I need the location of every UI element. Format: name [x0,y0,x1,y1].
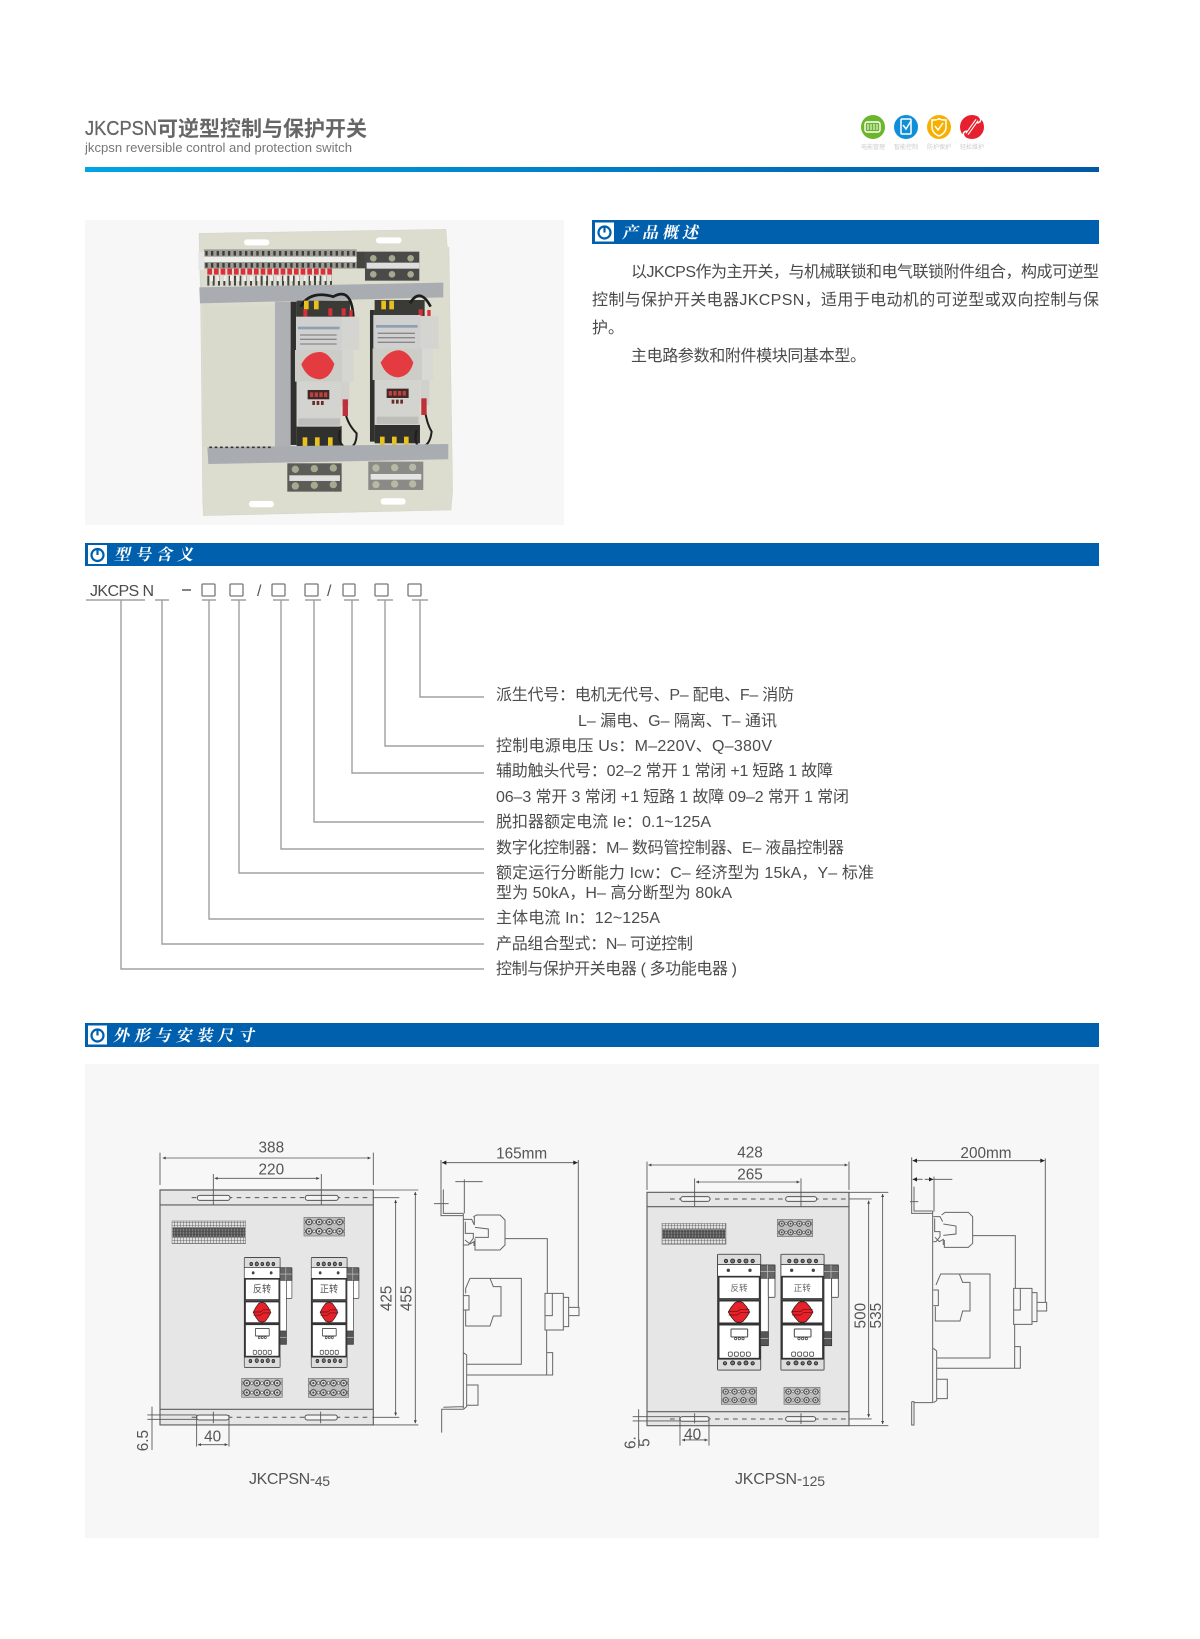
text block: product overview: 以JKCPS作为主开关，与机械联锁和电气联锁附件组合，构成可逆型 [631,263,1099,281]
text block: product overview [592,263,1099,365]
breaker: forward: 正转 [320,1282,338,1296]
dimension lines [633,1162,888,1448]
section header: 外形与安装尺寸 [85,1022,1099,1047]
dimension text: 425 [379,1286,396,1311]
caption: JKCPSN-125: JKCPSN- [735,1471,802,1488]
slots [197,1195,338,1420]
section header: 外形与安装尺寸: 外形与安装尺寸 [112,1022,258,1046]
parameter descriptions: L– 漏电、G– 隔离、T– 通讯 [578,712,777,730]
section header: 型号含义 [85,541,1099,566]
text block: product overview: 护。 [592,319,624,337]
right breaker in photo [370,296,439,447]
section header: 产品概述: 产品概述 [621,219,703,243]
caption: JKCPSN-45: 45 [315,1473,330,1489]
dimension text [623,1144,885,1449]
dimension text: 500 [853,1303,870,1328]
drawing: JKCPSN-125 front view [623,1144,888,1449]
parameter descriptions: 派生代号：电机无代号、P– 配电、F– 消防 [496,686,794,704]
subtitle: jkcpsn reversible control and protection switch [84,141,352,155]
dimension text: 220 [259,1161,284,1178]
breaker: reverse: 反转 [730,1282,748,1293]
drawing: JKCPSN-45 side view [434,1146,579,1433]
title: Chinese name: 可逆型控制与保护开关 [157,117,367,141]
dimension text: 265 [737,1166,763,1183]
parameter descriptions: 额定运行分断能力 Icw：C– 经济型为 15kA，Y– 标准 [496,864,874,882]
terminal strip [662,1223,726,1244]
slots [680,1197,817,1421]
parameter descriptions: 数字化控制器：M– 数码管控制器、E– 液晶控制器 [496,839,844,857]
left breaker in photo [291,294,359,448]
dimension text: 388 [259,1140,284,1157]
dimension text: 6.5 [135,1430,152,1451]
bottom terminal blocks in photo [287,462,423,492]
breaker: forward [781,1254,838,1370]
section header: 型号含义: 型号含义 [113,541,197,565]
text block: product overview: 主电路参数和附件模块同基本型。 [631,347,866,365]
parameter descriptions: 脱扣器额定电流 Ie：0.1~125A [496,813,711,831]
leader lines [86,600,484,969]
dimension text [135,1140,416,1451]
breaker: reverse [244,1258,292,1367]
icon: battery: 电能管理 [861,143,885,151]
title: model name: JKCPSN [85,118,157,140]
product photo: mounting plate with breakers [198,229,453,516]
breaker: forward: 正转 [794,1282,811,1293]
dimension lines [147,1153,418,1450]
text block: product overview: 控制与保护开关电器JKCPSN，适用于电动机的可逆型或双向控制与保 [592,291,1099,309]
model code: JKCPS N [90,583,154,600]
icon: power [595,222,614,242]
parameter descriptions: 产品组合型式：N– 可逆控制 [496,935,693,953]
parameter descriptions: 型为 50kA，H– 高分断型为 80kA [496,884,732,902]
drawing: JKCPSN-45 side view: 165mm [496,1146,547,1163]
title block [84,117,367,155]
dimension text: 455 [399,1286,416,1311]
drawing: JKCPSN-125 side view [910,1145,1047,1425]
dimension text: 428 [737,1144,763,1161]
dimension text: 40 [684,1426,701,1443]
parameter descriptions: 控制与保护开关电器 ( 多功能电器 ) [496,960,737,978]
drawing: JKCPSN-45 front view [135,1140,418,1451]
breaker: reverse [718,1254,775,1370]
parameter descriptions [496,686,874,978]
parameter descriptions: 辅助触头代号：02–2 常开 1 常闭 +1 短路 1 故障 [496,762,833,780]
model code diagram [86,583,874,978]
dimension text: 6. [623,1436,640,1449]
product photo panel [85,220,564,525]
parameter descriptions: 主体电流 In：12~125A [496,909,660,927]
terminal blocks [721,1219,820,1404]
breaker: forward [311,1258,359,1367]
icon: wrench: 轻松维护 [960,143,984,151]
header gradient bar [85,167,1099,172]
section header: 产品概述 [592,219,1099,244]
terminal strip [172,1221,246,1244]
dimension text: 535 [868,1303,885,1328]
parameter descriptions: 06–3 常开 3 常闭 +1 短路 1 故障 09–2 常开 1 常闭 [496,788,849,806]
model code: / [327,583,332,600]
caption: JKCPSN-45: JKCPSN- [249,1471,315,1488]
panel: dimension drawings [85,1064,1099,1538]
icon: power [88,545,107,564]
model code: / [257,583,262,600]
parameter descriptions: 控制电源电压 Us：M–220V、Q–380V [496,737,772,755]
terminal blocks [242,1217,349,1397]
drawing: JKCPSN-125 side view: 200mm [960,1145,1012,1162]
dimension text: 5 [637,1438,654,1447]
icon: tablet: 智能控制 [894,143,918,151]
icon: shield: 防护保护 [927,143,951,151]
dimension text: 40 [204,1429,221,1446]
feature icons [861,115,984,151]
caption: JKCPSN-125: 125 [802,1473,825,1489]
model code [90,583,421,600]
icon: power [88,1026,107,1044]
breaker: reverse: 反转 [253,1282,271,1296]
